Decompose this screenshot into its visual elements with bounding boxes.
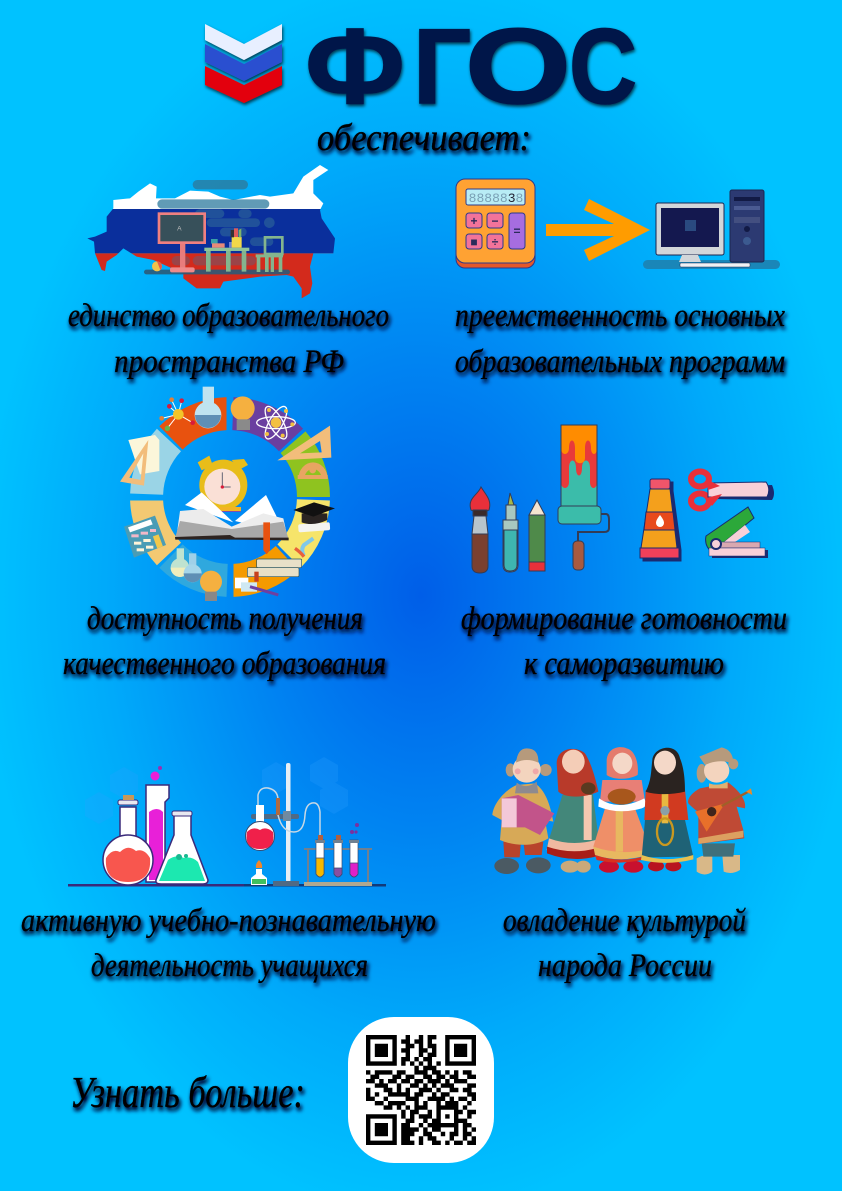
- caption: mastering the culture: народа России: [538, 948, 712, 984]
- icon: calculator: =: [513, 224, 521, 238]
- paint brush: [470, 487, 490, 573]
- paint roller: [558, 425, 609, 570]
- icon: Russia flag map with classroom: A: [177, 226, 182, 233]
- subtitle: обеспечивает:: [317, 117, 531, 159]
- title: FGOS: С: [569, 6, 637, 126]
- man with accordion: [492, 748, 554, 874]
- open book: [185, 492, 277, 525]
- QR code: [348, 1017, 494, 1163]
- retort stand: [286, 763, 290, 882]
- paper and triangle: [128, 435, 159, 474]
- woman with necklace: [641, 748, 693, 871]
- title: FGOS: О: [465, 6, 571, 126]
- burner: [256, 860, 262, 868]
- title: FGOS: Ф: [305, 6, 405, 126]
- icon: calculator: ÷: [492, 235, 499, 249]
- caption: active learning: активную учебно-познавательную: [21, 903, 436, 939]
- icon: calculator: [456, 179, 535, 268]
- title: FGOS: Г: [413, 6, 471, 126]
- books: [257, 559, 302, 568]
- caption: continuity of programs: преемственность основных: [455, 298, 785, 334]
- ring segments: [130, 397, 330, 597]
- caption: unity of educational space: [68, 298, 389, 380]
- icon: stapler: [706, 507, 768, 558]
- caption: active learning: [21, 903, 436, 984]
- woman with bread: [593, 747, 650, 873]
- caption: access to quality education: [63, 601, 386, 682]
- protractor: [298, 462, 328, 479]
- icon: calculator: 8888838: [469, 191, 523, 206]
- caption: mastering the culture: овладение культурой: [503, 903, 746, 939]
- cone flask: [156, 815, 208, 884]
- learn more label: Узнать больше:: [70, 1068, 305, 1117]
- bottom flasks and bulb: [177, 548, 184, 562]
- caption: readiness for self-development: к саморазвитию: [524, 646, 724, 682]
- icon: people in Russian folk dress: [492, 747, 752, 874]
- graduation cap: [298, 522, 330, 532]
- bulb: [231, 396, 255, 420]
- caption: readiness for self-development: формирование готовности: [461, 601, 787, 637]
- pencil: [529, 500, 545, 571]
- flask: [203, 387, 214, 403]
- caption: unity of educational space: единство образовательного: [68, 298, 389, 334]
- icon: paint tube: [640, 479, 681, 561]
- caption: access to quality education: доступность получения: [87, 601, 363, 637]
- test tube rack: [304, 849, 372, 882]
- caption: continuity of programs: образовательных программ: [455, 344, 785, 380]
- icon: education circle: [120, 387, 335, 601]
- icon: calculator: −: [491, 214, 499, 228]
- calculator: [124, 516, 166, 558]
- alarm clock: [198, 456, 248, 470]
- marker: [503, 493, 518, 572]
- icon: chemistry flasks: [68, 757, 386, 886]
- magnet: [302, 538, 313, 556]
- caption: unity of educational space: пространства РФ: [114, 344, 344, 380]
- icon: Russia flag map with classroom: [88, 165, 335, 298]
- title: FGOS: [305, 6, 637, 126]
- icon: calculator: ■: [470, 235, 478, 249]
- caption: mastering the culture: [503, 903, 746, 984]
- arrow: [546, 199, 650, 261]
- caption: readiness for self-development: [461, 601, 787, 682]
- atom: [257, 403, 295, 442]
- round flask: [120, 807, 136, 841]
- icon: desktop computer: [643, 190, 780, 269]
- icon: art supplies: [470, 425, 609, 573]
- man with balalaika: [688, 747, 752, 874]
- set square ruler: [277, 426, 331, 460]
- tall tube: [146, 785, 169, 882]
- icon: scissors: [691, 472, 774, 508]
- caption: access to quality education: качественного образования: [63, 646, 386, 682]
- hanging flask: [256, 805, 264, 825]
- logo: FGOS chevron emblem: [205, 24, 282, 103]
- caption: active learning: деятельность учащихся: [91, 948, 368, 984]
- caption: continuity of programs: [455, 298, 785, 380]
- woman with flowers: [547, 749, 598, 873]
- icon: calculator: +: [470, 214, 478, 228]
